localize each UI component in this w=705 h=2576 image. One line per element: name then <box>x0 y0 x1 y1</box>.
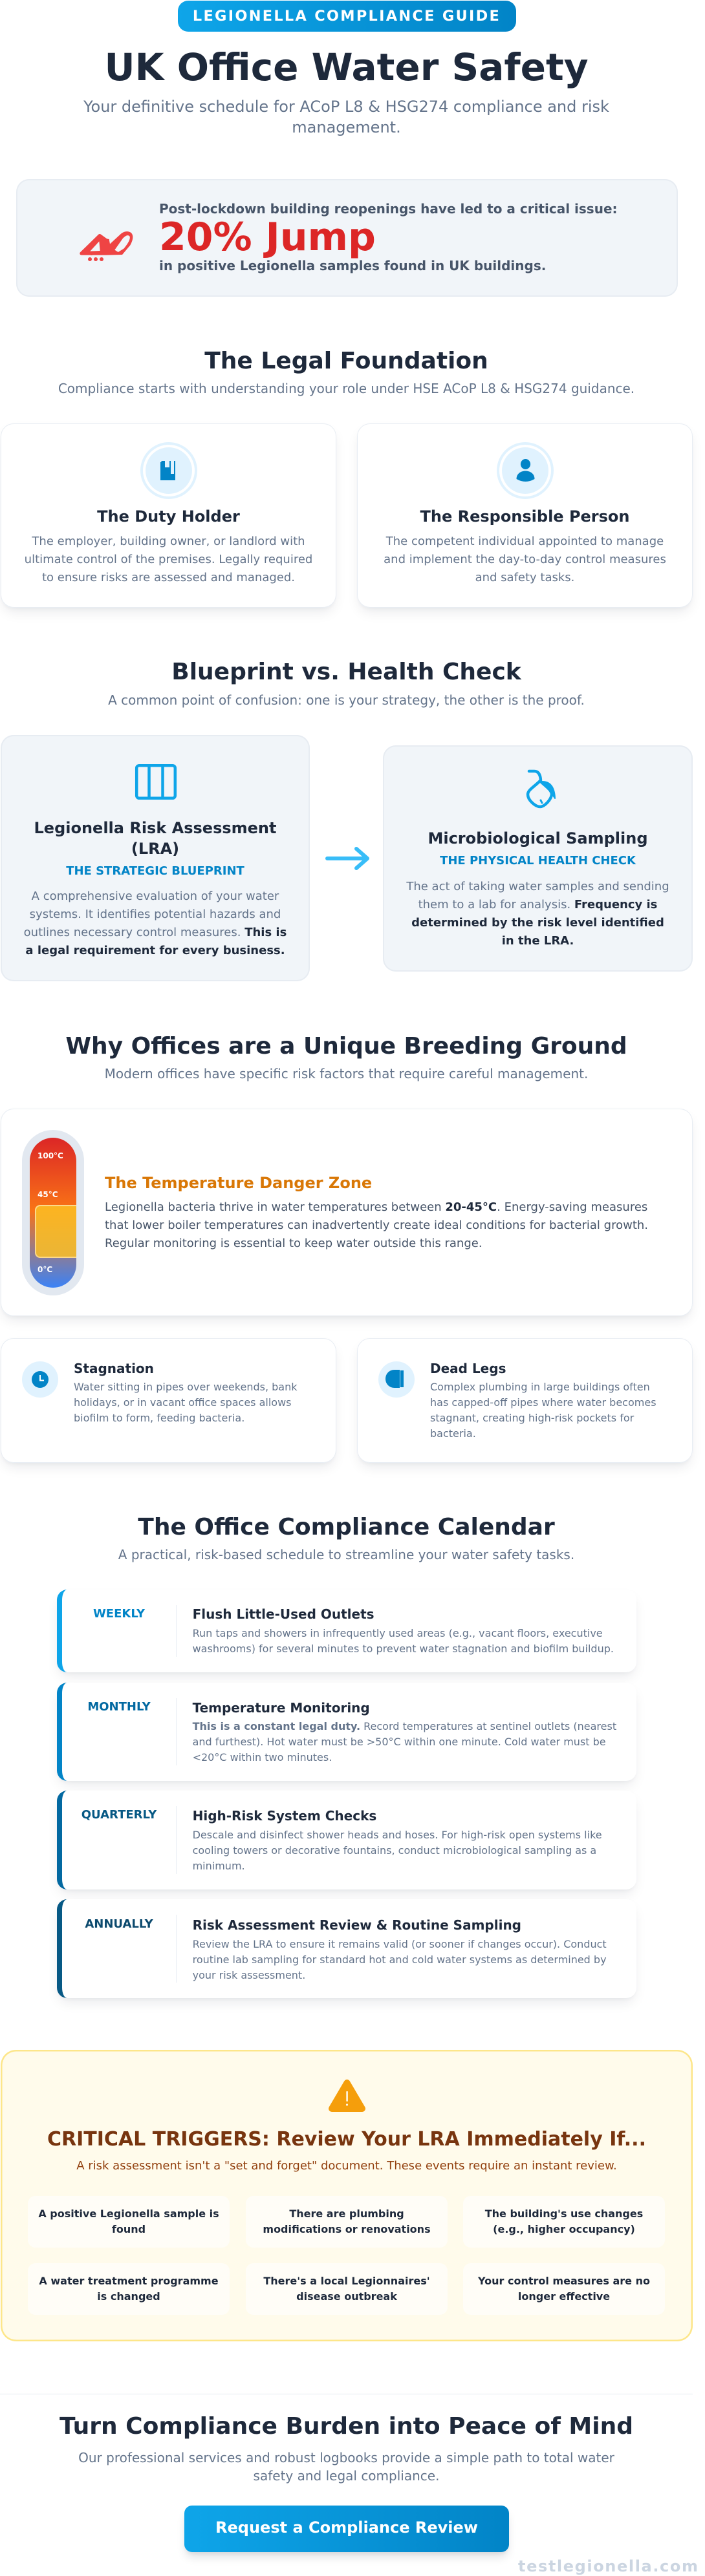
item: water treatment: A water treatment programme <box>39 2274 219 2287</box>
text: stagnation description: biofilm to form, feeding bacteria. <box>74 1412 244 1423</box>
panel: stagnation <box>1 1338 336 1463</box>
text: blueprint intro: A common point of confusion: one is your strategy, the other is the proof. <box>108 692 585 708</box>
text: dead legs description: has capped-off pipes where water becomes <box>430 1396 656 1408</box>
panel: annual task <box>57 1899 636 1998</box>
text: danger zone description: that lower boiler temperatures can inadvertently create ideal conditions for bacterial growth. <box>105 1219 648 1232</box>
text: big statistic: 20% Jump <box>159 215 376 260</box>
text: triggers intro: A risk assessment isn't a "set and forget" document. These events require an instant review. <box>76 2159 617 2173</box>
text: danger zone description: Legionella bacteria thrive in water temperatures between 20-45°C. Energy-saving measures <box>105 1200 647 1214</box>
item: building use <box>463 2196 665 2248</box>
label: strategic blueprint: THE STRATEGIC BLUEPRINT <box>66 864 244 878</box>
heading: danger zone: The Temperature Danger Zone <box>105 1174 372 1192</box>
heading: breeding ground: Why Offices are a Unique Breeding Ground <box>65 1033 627 1059</box>
text: responsible person description: The competent individual appointed to manage <box>386 535 664 548</box>
label: weekly: WEEKLY <box>93 1607 145 1621</box>
item: ineffective controls: Your control measures are no <box>478 2274 650 2287</box>
icon: red warning chart <box>80 231 133 261</box>
label: 100 degrees: 100°C <box>38 1151 63 1160</box>
heading: dead legs: Dead Legs <box>430 1360 506 1376</box>
text: duty holder description: to ensure risks are assessed and managed. <box>42 571 295 584</box>
panel: risk assessment <box>1 735 310 981</box>
text: high-risk description: Descale and disinfect shower heads and hoses. For high-risk open systems like <box>193 1828 602 1841</box>
text: responsible person description: and implement the day-to-day control measures <box>384 553 666 566</box>
text: call to action description: Our professional services and robust logbooks provide a simple path to total water <box>78 2450 614 2465</box>
label: 0 degrees: 0°C <box>38 1265 52 1274</box>
text: high-risk description <box>193 1828 602 1872</box>
text: LRA description: systems. It identifies potential hazards and <box>30 908 281 921</box>
heading: LRA: Legionella Risk Assessment <box>34 819 276 837</box>
button: request review: Request a Compliance Review <box>215 2518 478 2537</box>
heading: LRA: (LRA) <box>131 840 179 858</box>
heading: call to action: Turn Compliance Burden into Peace of Mind <box>60 2413 633 2440</box>
text: dead legs description: stagnant, creating high-risk pockets for <box>430 1412 634 1423</box>
heading: flush outlets: Flush Little-Used Outlets <box>193 1606 374 1622</box>
text: dead legs description: bacteria. <box>430 1427 476 1439</box>
text: review description: routine lab sampling for standard hot and cold water systems as determined by <box>193 1953 607 1965</box>
text: responsible person description <box>384 535 666 584</box>
item: positive sample: A positive Legionella sample is <box>38 2207 219 2220</box>
item: local outbreak <box>246 2263 448 2315</box>
title: UK Office Water Safety <box>104 45 589 89</box>
item: water treatment <box>28 2263 230 2315</box>
item: ineffective controls: longer effective <box>518 2290 610 2303</box>
text: sampling description: The act of taking water samples and sending <box>406 880 669 893</box>
item: local outbreak: disease outbreak <box>296 2290 397 2303</box>
text: lead-in: Post-lockdown building reopenings have led to a critical issue: <box>159 201 618 217</box>
text: monitoring description: This is a constant legal duty. Record temperatures at sentinel outlets (nearest <box>193 1720 616 1732</box>
text: breeding ground intro: Modern offices have specific risk factors that require careful management. <box>105 1066 588 1081</box>
text: danger zone description: Regular monitoring is essential to keep water outside this range. <box>105 1237 483 1250</box>
watermark: testlegionella.com <box>518 2557 699 2575</box>
heading: stagnation: Stagnation <box>74 1360 154 1376</box>
label: quarterly: QUARTERLY <box>81 1808 157 1822</box>
text: stagnation description: Water sitting in pipes over weekends, bank <box>74 1381 297 1392</box>
text: statistic caption: in positive Legionella samples found in UK buildings. <box>159 258 546 273</box>
text: sampling description: them to a lab for analysis. Frequency is <box>418 898 657 911</box>
heading: sampling: Microbiological Sampling <box>428 829 648 847</box>
heading: duty holder: The Duty Holder <box>97 507 240 526</box>
text: flush description: washrooms) for several minutes to prevent water stagnation and biofilm buildup. <box>193 1642 614 1655</box>
icon: clock <box>22 1361 58 1398</box>
panel: statistic alert <box>16 179 678 297</box>
item: water treatment: is changed <box>97 2290 160 2303</box>
text: call to action description <box>78 2450 614 2484</box>
item: plumbing changes: modifications or renovations <box>263 2222 431 2235</box>
item: plumbing changes: There are plumbing <box>289 2207 404 2220</box>
heading: compliance calendar: The Office Compliance Calendar <box>138 1514 555 1540</box>
text: duty holder description: The employer, building owner, or landlord with <box>32 535 305 548</box>
item: plumbing changes <box>246 2196 448 2248</box>
arrow: blueprint to health check <box>325 847 369 870</box>
text: review description <box>193 1938 607 1981</box>
text: sampling description: determined by the risk level identified <box>411 916 664 930</box>
text: monitoring description: <20°C within two minutes. <box>193 1751 332 1763</box>
label: physical health check: THE PHYSICAL HEALTH CHECK <box>440 854 636 868</box>
text: LRA description: A comprehensive evaluation of your water <box>32 889 279 903</box>
text: sampling description <box>406 880 669 948</box>
subtitle: management. <box>292 118 401 136</box>
icon: blueprint columns <box>135 764 177 800</box>
text: duty holder description: ultimate control of the premises. Legally required <box>25 553 312 566</box>
item: local outbreak: There's a local Legionnaires' <box>263 2274 430 2287</box>
heading: responsible person: The Responsible Person <box>420 507 630 526</box>
panel: weekly task <box>57 1590 636 1672</box>
heading: critical triggers: CRITICAL TRIGGERS: Review Your LRA Immediately If... <box>47 2128 646 2151</box>
text: review description: Review the LRA to ensure it remains valid (or sooner if changes occur). Conduct <box>193 1938 607 1950</box>
text: LRA description: a legal requirement for every business. <box>25 944 285 957</box>
panel: critical triggers <box>1 2050 693 2341</box>
text: stagnation description <box>74 1381 298 1423</box>
text: LRA description <box>24 889 287 957</box>
panel: call to action <box>0 2394 693 2576</box>
panel: microbiological sampling <box>383 745 693 971</box>
panel: monthly task <box>57 1683 636 1781</box>
panel: duty holder <box>1 423 336 608</box>
text: review description: your risk assessment. <box>193 1969 305 1981</box>
panel: quarterly task <box>57 1791 636 1889</box>
text: high-risk description: cooling towers or decorative fountains, conduct microbiological sampling as a <box>193 1844 596 1857</box>
icon: warning triangle <box>329 2080 365 2112</box>
subtitle: Your definitive schedule for ACoP L8 & HSG274 compliance and risk <box>83 98 609 116</box>
item: positive sample: found <box>112 2222 146 2235</box>
panel: temperature danger zone <box>1 1109 693 1316</box>
heading: legal foundation: The Legal Foundation <box>204 348 488 374</box>
text: calendar intro: A practical, risk-based schedule to streamline your water safety tasks. <box>118 1547 574 1562</box>
text: high-risk description: minimum. <box>193 1859 245 1872</box>
text: legal foundation intro: Compliance starts with understanding your role under HSE ACoP L8 & HSG274 guidance. <box>58 381 634 396</box>
text: dead legs description: Complex plumbing in large buildings often <box>430 1381 650 1392</box>
heading: risk assessment review: Risk Assessment Review & Routine Sampling <box>193 1917 521 1933</box>
item: positive sample <box>28 2196 230 2248</box>
text: responsible person description: and safety tasks. <box>475 571 574 584</box>
heading: LRA <box>34 819 276 858</box>
text: sampling description: in the LRA. <box>502 934 574 948</box>
chart: thermometer <box>22 1130 84 1295</box>
label: annually: ANNUALLY <box>85 1917 153 1930</box>
icon: person badge <box>502 447 548 494</box>
text: LRA description: outlines necessary control measures. This is <box>24 926 287 939</box>
text: monitoring description <box>193 1720 616 1763</box>
text: flush description <box>193 1626 614 1655</box>
icon: book badge <box>145 447 191 494</box>
heading: blueprint vs health check: Blueprint vs. Health Check <box>171 659 521 685</box>
item: building use: The building's use changes <box>485 2207 643 2220</box>
item: building use: (e.g., higher occupancy) <box>493 2222 635 2235</box>
badge: guide label: LEGIONELLA COMPLIANCE GUIDE <box>193 8 501 25</box>
subtitle <box>83 98 609 136</box>
item: ineffective controls <box>463 2263 665 2315</box>
label: monthly: MONTHLY <box>87 1700 151 1714</box>
text: dead legs description <box>430 1381 656 1439</box>
heading: high-risk checks: High-Risk System Checks <box>193 1808 376 1824</box>
icon: capped pipe <box>378 1361 415 1398</box>
text: stagnation description: holidays, or in vacant office spaces allows <box>74 1396 292 1408</box>
text: monitoring description: and furthest). Hot water must be >50°C within one minute. Cold water must be <box>193 1736 606 1748</box>
text: duty holder description <box>25 535 312 584</box>
panel: responsible person <box>357 423 693 608</box>
heading: temperature monitoring: Temperature Monitoring <box>193 1700 370 1716</box>
text: danger zone description <box>105 1200 648 1250</box>
button: request review <box>184 2506 509 2552</box>
badge: guide label <box>177 1 516 32</box>
text: flush description: Run taps and showers in infrequently used areas (e.g., vacant floors, executive <box>193 1626 603 1639</box>
danger range band <box>35 1205 93 1258</box>
icon: sampling flask <box>526 769 556 808</box>
text: call to action description: safety and legal compliance. <box>254 2468 439 2484</box>
panel: dead legs <box>357 1338 693 1463</box>
label: 45 degrees: 45°C <box>38 1190 58 1199</box>
